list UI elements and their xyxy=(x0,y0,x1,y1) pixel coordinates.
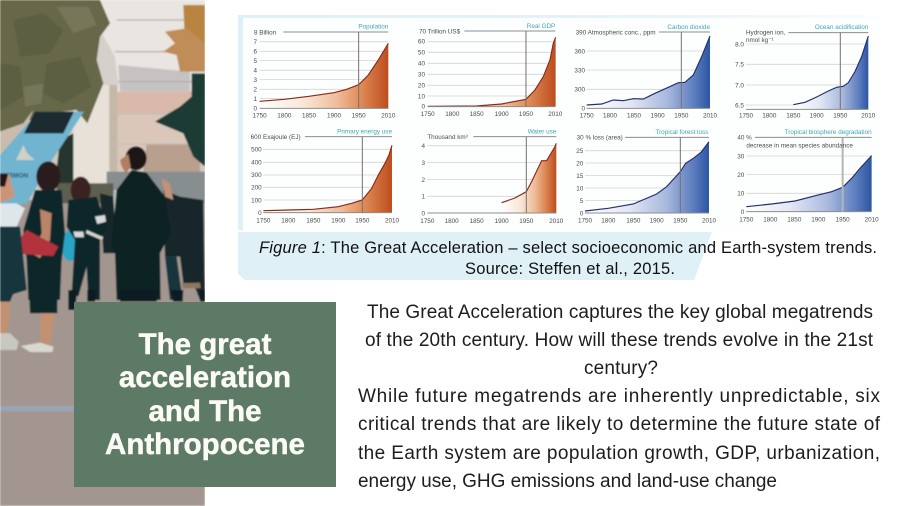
chart: tropical biosphere degradation: 30 xyxy=(737,153,745,160)
chart: tropical biosphere degradation: 1950 xyxy=(836,217,850,224)
text block: justified paragraph: While future megatrends are inherently unpredictable, six xyxy=(358,386,880,407)
chart: ocean acidification: 7.5 xyxy=(735,62,744,69)
chart: tropical forest loss: 1850 xyxy=(626,217,641,224)
title text: acceleration xyxy=(119,361,291,394)
chart: water use: Thousand km³ xyxy=(427,134,468,141)
chart: real GDP: 1800 xyxy=(445,111,460,118)
chart: water use: 3 xyxy=(421,160,425,167)
chart: tropical biosphere degradation xyxy=(737,129,879,224)
chart: primary energy use: 1750 xyxy=(256,217,271,224)
photo: crowd outside a plaza xyxy=(0,0,205,506)
chart: tropical biosphere degradation: 1850 xyxy=(787,217,802,224)
chart: tropical biosphere degradation: 40 % xyxy=(737,135,752,142)
chart: ocean acidification: 2010 xyxy=(861,112,876,119)
chart: tropical forest loss: 1800 xyxy=(601,217,616,224)
chart: real GDP: 2010 xyxy=(548,111,563,118)
text block: justified paragraph: energy use, GHG emissions and land-use change xyxy=(358,471,777,492)
figure caption: Figure 1: The Great Acceleration – select socioeconomic and Earth-system trends. xyxy=(259,239,877,257)
chart: water use: 2 xyxy=(421,177,425,184)
panel: figure background xyxy=(238,15,880,280)
chart: real GDP: 60 xyxy=(418,39,425,46)
chart: tropical biosphere degradation: 10 xyxy=(737,191,745,198)
woman left xyxy=(0,173,27,298)
chart: carbon dioxide: 1900 xyxy=(651,112,665,119)
chart: carbon dioxide: 1950 xyxy=(674,112,689,119)
chart: primary energy use: 2010 xyxy=(385,217,400,224)
title text: The great xyxy=(139,328,272,361)
lower legs and shoes xyxy=(0,290,205,352)
chart: tropical biosphere degradation: 1750 xyxy=(739,217,754,224)
chart: water use: 4 xyxy=(421,143,425,150)
chart: tropical forest loss: 20 xyxy=(576,160,584,167)
chart: ocean acidification: 6.5 xyxy=(735,102,744,109)
chart: tropical biosphere degradation: 1800 xyxy=(763,217,778,224)
chart: real GDP: 70 Trillion US$ xyxy=(419,28,461,35)
chart: tropical forest loss: 1750 xyxy=(578,217,593,224)
title text: Anthropocene xyxy=(105,428,305,461)
chart: primary energy use: 1800 xyxy=(281,217,296,224)
chart: population: 4 xyxy=(253,67,257,74)
chart: carbon dioxide: 1850 xyxy=(627,112,642,119)
chart: tropical forest loss xyxy=(576,129,717,224)
chart: carbon dioxide: 1800 xyxy=(603,112,618,119)
figure caption xyxy=(259,239,877,278)
chart: tropical forest loss: 1950 xyxy=(673,217,688,224)
chart: population: 1750 xyxy=(253,113,267,120)
chart: carbon dioxide: 2010 xyxy=(703,112,718,119)
chart: primary energy use xyxy=(251,128,400,224)
woman in middle xyxy=(67,177,107,300)
chart: tropical biosphere degradation: 0 xyxy=(741,209,745,216)
chart: carbon dioxide: 360 xyxy=(574,48,585,55)
chart: real GDP: 1750 xyxy=(421,111,435,118)
chart: carbon dioxide xyxy=(574,24,718,119)
figure caption: Source: Steffen et al., 2015. xyxy=(465,260,675,278)
chart: primary energy use: Primary energy use xyxy=(337,128,392,135)
chart: population: 1950 xyxy=(352,113,366,120)
chart: primary energy use: 500 xyxy=(251,147,262,154)
chart: primary energy use: 600 Exajoule (EJ) xyxy=(251,134,301,141)
chart: tropical forest loss: 5 xyxy=(580,198,584,205)
chart: real GDP: 40 xyxy=(418,61,425,68)
chart: population: 1800 xyxy=(277,113,292,120)
chart: tropical forest loss: 30 % loss (area) xyxy=(577,135,623,142)
woman in black xyxy=(13,161,65,300)
title text: and The xyxy=(148,395,262,428)
chart: carbon dioxide: 390 Atmospheric conc., ppm xyxy=(576,29,656,36)
chart: water use: 1850 xyxy=(470,218,484,225)
sign xyxy=(0,112,84,204)
chart: primary energy use: 1950 xyxy=(355,217,370,224)
chart: population: 7 xyxy=(253,39,257,46)
chart: tropical forest loss: Tropical forest loss xyxy=(655,129,708,136)
title panel xyxy=(74,302,336,487)
text block: centred introduction: century? xyxy=(584,358,658,379)
chart: tropical biosphere degradation: decrease in mean species abundance xyxy=(746,143,853,150)
chart: population: 1900 xyxy=(327,113,342,120)
chart: ocean acidification: nmol kg⁻¹ xyxy=(746,37,774,44)
chart: tropical biosphere degradation: 20 xyxy=(737,172,745,179)
chart: carbon dioxide: 300 xyxy=(574,87,585,94)
chart: population: 5 xyxy=(253,58,257,65)
chart: ocean acidification: 1800 xyxy=(762,112,777,119)
chart: tropical forest loss: 25 xyxy=(576,148,584,155)
chart: population: Population xyxy=(358,24,389,31)
chart: real GDP: 30 xyxy=(418,71,425,78)
sign: RMON xyxy=(8,172,29,179)
text block: justified paragraph: the Earth system are population growth, GDP, urbanization, xyxy=(358,443,880,464)
chart: tropical forest loss: 10 xyxy=(576,185,584,192)
chart: real GDP: 10 xyxy=(418,93,425,100)
chart: population: 0 xyxy=(253,105,257,112)
chart: ocean acidification: Hydrogen ion, xyxy=(746,30,786,37)
chart: population: 1 xyxy=(253,96,257,103)
chart: water use xyxy=(420,128,564,225)
chart: water use: 1900 xyxy=(495,218,509,225)
text block: centred introduction: of the 20th century. How will these trends evolve in the 21st xyxy=(365,330,874,351)
chart: real GDP xyxy=(418,23,563,118)
chart: ocean acidification: 7.0 xyxy=(735,82,744,89)
chart: real GDP: Real GDP xyxy=(527,23,555,30)
chart: primary energy use: 100 xyxy=(251,197,262,204)
chart: tropical forest loss: 15 xyxy=(576,173,584,180)
text block: centred introduction xyxy=(365,302,874,379)
chart: primary energy use: 300 xyxy=(251,172,262,179)
chart: tropical biosphere degradation: 2010 xyxy=(865,217,879,224)
chart: population xyxy=(253,24,396,120)
chart: ocean acidification: 1950 xyxy=(833,112,848,119)
chart: water use: 1800 xyxy=(445,218,459,225)
chart: ocean acidification xyxy=(735,24,876,119)
chart: carbon dioxide: 0 xyxy=(581,105,585,112)
text block: justified paragraph xyxy=(358,386,881,492)
chart: population: 2 xyxy=(253,86,257,93)
chart: carbon dioxide: Carbon dioxide xyxy=(667,24,710,31)
chart: population: 8 Billion xyxy=(254,29,277,36)
chart: tropical forest loss: 1900 xyxy=(650,217,664,224)
chart: ocean acidification: 1850 xyxy=(786,112,801,119)
chart: tropical biosphere degradation: 1900 xyxy=(811,217,826,224)
chart: carbon dioxide: 330 xyxy=(574,67,585,74)
chart: population: 1850 xyxy=(302,113,317,120)
chart: ocean acidification: Ocean acidification xyxy=(815,24,869,31)
chart: ocean acidification: 8.0 xyxy=(735,41,744,48)
chart: primary energy use: 0 xyxy=(258,210,262,217)
chart: primary energy use: 1850 xyxy=(306,217,321,224)
chart: primary energy use: 400 xyxy=(251,160,262,167)
chart: water use: 1 xyxy=(421,194,425,201)
chart: water use: 1950 xyxy=(519,218,534,225)
chart: population: 2010 xyxy=(381,113,396,120)
chart: tropical forest loss: 2010 xyxy=(702,217,717,224)
text block: centred introduction: The Great Acceleration captures the key global megatrends xyxy=(367,302,873,323)
chart: real GDP: 1950 xyxy=(519,111,533,118)
chart: water use: 0 xyxy=(421,210,425,217)
chart: carbon dioxide: 1750 xyxy=(580,112,594,119)
chart: tropical forest loss: 0 xyxy=(580,210,584,217)
chart: primary energy use: 200 xyxy=(251,185,262,192)
chart: water use: Water use xyxy=(528,128,557,135)
chart: real GDP: 1900 xyxy=(495,111,509,118)
chart: real GDP: 0 xyxy=(421,104,425,111)
chart: population: 6 xyxy=(253,48,257,55)
chart: real GDP: 20 xyxy=(418,82,425,89)
chart: water use: 1750 xyxy=(420,218,435,225)
background crowd xyxy=(100,193,117,253)
chart: tropical biosphere degradation: Tropical biosphere degradation xyxy=(785,129,872,136)
text block: justified paragraph: critical trends that are likely to determine the future state of xyxy=(358,414,881,435)
chart: ocean acidification: 1900 xyxy=(810,112,824,119)
chart: real GDP: 1850 xyxy=(470,111,484,118)
title text xyxy=(105,328,305,461)
chart: population: 3 xyxy=(253,77,257,84)
chart: ocean acidification: 1750 xyxy=(739,112,754,119)
man in black jacket xyxy=(112,146,171,300)
chart: real GDP: 50 xyxy=(418,50,425,57)
chart: water use: 2010 xyxy=(549,218,564,225)
chart: primary energy use: 1900 xyxy=(331,217,346,224)
